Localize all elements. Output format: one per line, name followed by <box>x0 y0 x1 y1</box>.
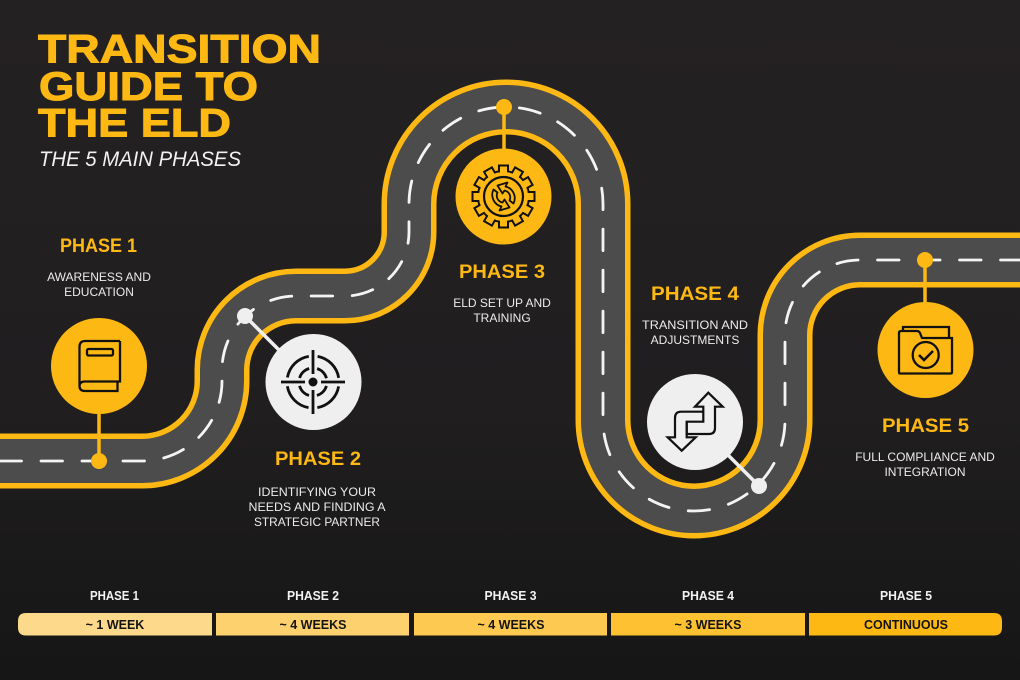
timeline labels: PHASE 3 <box>484 589 537 603</box>
timeline bar: ~ 4 WEEKS <box>477 618 545 632</box>
title: THE ELD <box>38 102 231 146</box>
phase 4 description: TRANSITION AND <box>642 318 748 332</box>
phase 2 description <box>248 485 386 529</box>
phase 1 marker <box>51 318 147 469</box>
title: TRANSITION <box>38 28 321 72</box>
phase 4 description: ADJUSTMENTS <box>651 333 739 347</box>
phase 2 description: NEEDS AND FINDING A <box>248 500 386 514</box>
title <box>38 28 321 146</box>
phase 1 description <box>47 270 151 299</box>
phase 5 description <box>855 450 995 479</box>
phase 1 description: EDUCATION <box>64 285 134 299</box>
timeline bar <box>18 613 1002 636</box>
phase 2 marker <box>237 308 362 430</box>
phase 3 heading: PHASE 3 <box>459 262 545 283</box>
phase 5 description: FULL COMPLIANCE AND <box>855 450 995 464</box>
phase 2 heading: PHASE 2 <box>275 449 361 470</box>
timeline labels: PHASE 4 <box>682 589 734 603</box>
timeline labels: PHASE 5 <box>880 589 932 603</box>
phase 5 marker <box>878 252 974 398</box>
phase 1 heading: PHASE 1 <box>60 236 137 257</box>
phase 3 description: ELD SET UP AND <box>453 296 551 310</box>
title: GUIDE TO <box>39 65 258 109</box>
icon: book <box>80 341 120 391</box>
timeline bar: ~ 4 WEEKS <box>279 618 347 632</box>
phase 3 marker <box>456 99 552 244</box>
subtitle: THE 5 MAIN PHASES <box>39 147 242 171</box>
phase 4 description <box>642 318 748 347</box>
icon: opposing arrows <box>668 393 723 451</box>
phase 4 marker <box>647 374 767 494</box>
phase 2 description: STRATEGIC PARTNER <box>254 515 380 529</box>
timeline bar: ~ 1 WEEK <box>86 618 144 632</box>
timeline labels: PHASE 2 <box>287 589 339 603</box>
phase 3 description <box>453 296 551 325</box>
icon: gear with arrows <box>472 166 534 228</box>
timeline labels <box>90 589 932 603</box>
phase 3 description: TRAINING <box>473 311 531 325</box>
phase 4 heading: PHASE 4 <box>651 284 739 305</box>
phase 2 description: IDENTIFYING YOUR <box>258 485 376 499</box>
icon: folder with check <box>899 327 952 374</box>
winding road <box>0 107 1020 511</box>
icon: target <box>281 350 345 414</box>
timeline bar: CONTINUOUS <box>864 618 948 632</box>
phase 5 description: INTEGRATION <box>884 465 966 479</box>
timeline labels: PHASE 1 <box>90 589 139 603</box>
timeline bar: ~ 3 WEEKS <box>674 618 742 632</box>
phase 1 description: AWARENESS AND <box>47 270 151 284</box>
phase 5 heading: PHASE 5 <box>882 416 969 437</box>
